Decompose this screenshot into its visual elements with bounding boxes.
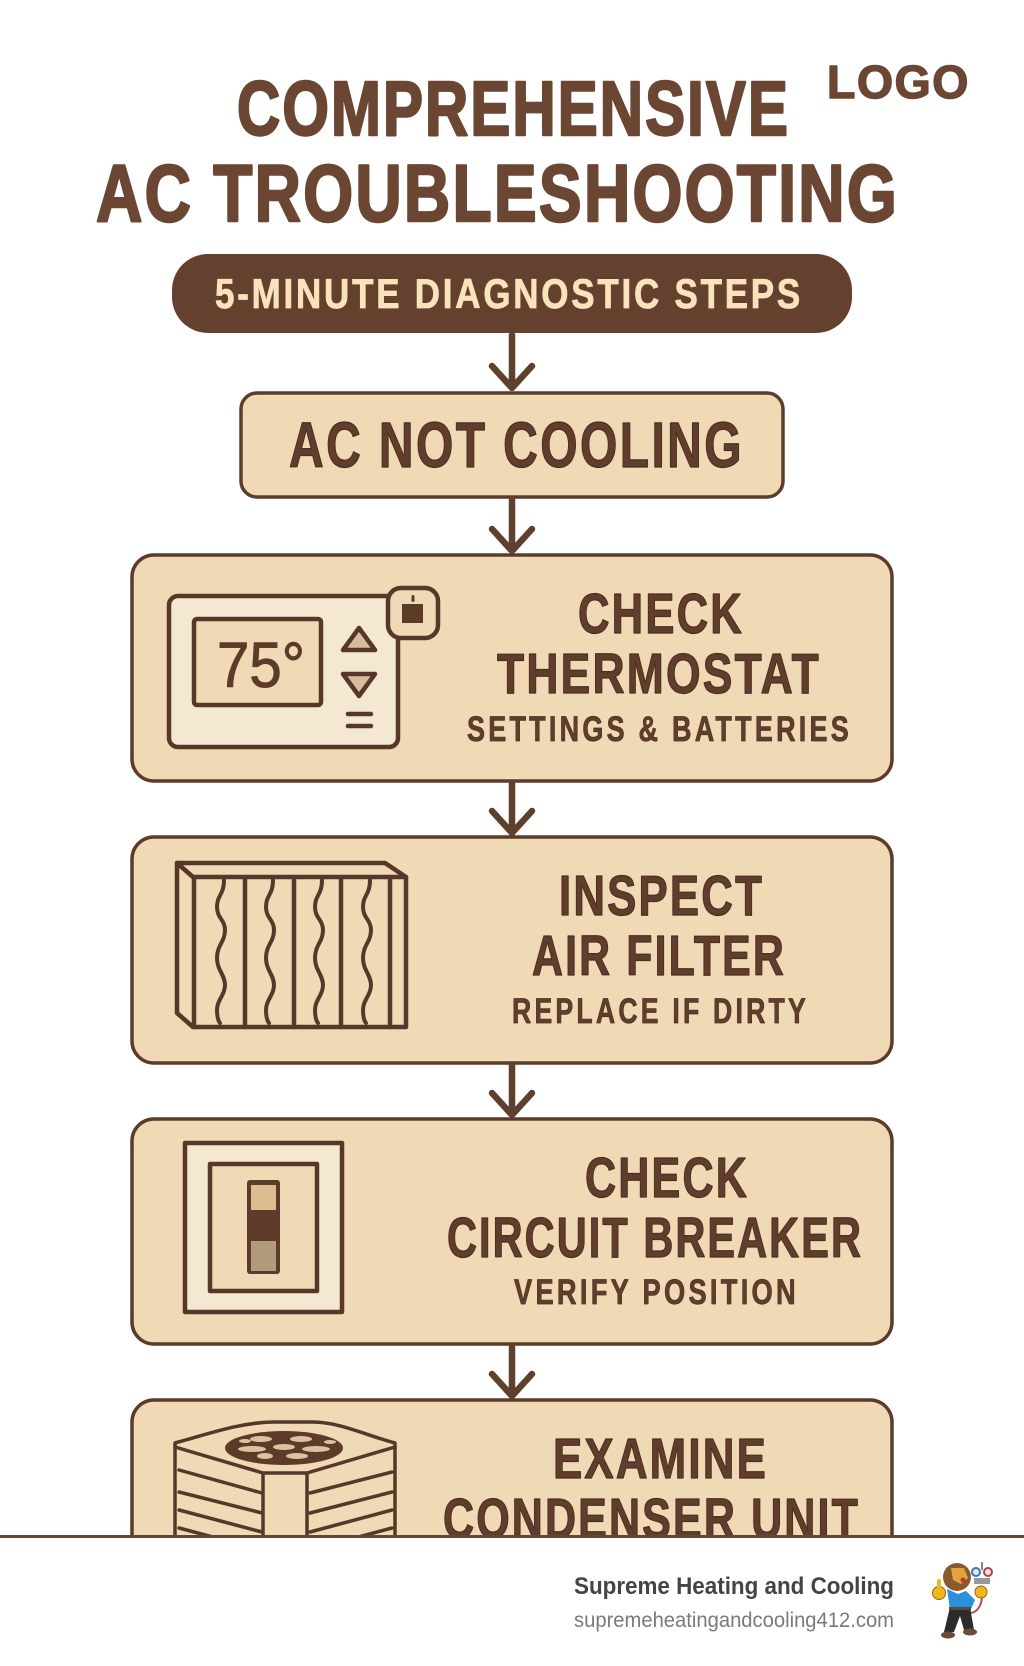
step text: examine condenser unit: EXAMINE	[553, 1427, 768, 1491]
title: COMPREHENSIVE	[237, 66, 790, 152]
logo text: LOGO	[827, 56, 970, 108]
step text: check circuit breaker	[447, 1146, 863, 1312]
arrow: problem box to thermostat step	[492, 499, 532, 551]
arrow: breaker to condenser step	[492, 1346, 532, 1396]
footer company name: Supreme Heating and Cooling	[574, 1573, 894, 1600]
footer website: supremeheatingandcooling412.com	[574, 1609, 894, 1632]
step text: check circuit breaker: CHECK	[585, 1146, 749, 1210]
step text: check thermostat	[467, 582, 852, 749]
subtitle pill: 5-MINUTE DIAGNOSTIC STEPS	[215, 270, 803, 317]
footer band	[0, 1535, 1024, 1666]
problem box: AC not cooling: AC NOT COOLING	[289, 409, 744, 481]
icon: air filter	[177, 863, 406, 1027]
panel: check thermostat	[132, 555, 892, 781]
icon: lion technician mascot	[932, 1562, 992, 1638]
step text: check thermostat: THERMOSTAT	[497, 642, 821, 706]
step text: check circuit breaker: CIRCUIT BREAKER	[447, 1206, 863, 1270]
title	[96, 66, 899, 239]
panel: inspect air filter	[132, 837, 892, 1063]
step text: inspect air filter: INSPECT	[559, 864, 764, 928]
arrow: thermostat to filter step	[492, 783, 532, 833]
arrow: pill to problem box	[492, 335, 532, 388]
arrow: filter to breaker step	[492, 1065, 532, 1115]
step text: inspect air filter	[512, 864, 809, 1031]
panel: check circuit breaker	[132, 1119, 892, 1344]
step text: check circuit breaker: VERIFY POSITION	[514, 1273, 799, 1312]
icon: circuit breaker switch	[185, 1143, 342, 1312]
icon: thermostat: 75°	[217, 629, 305, 701]
step text: check thermostat: CHECK	[578, 582, 744, 646]
step text: examine condenser unit	[443, 1427, 860, 1551]
step text: inspect air filter: REPLACE IF DIRTY	[512, 992, 809, 1031]
icon: thermostat	[169, 588, 438, 747]
step text: examine condenser unit: CONDENSER UNIT	[443, 1487, 860, 1551]
step text: check thermostat: SETTINGS & BATTERIES	[467, 710, 852, 749]
icon: condenser unit	[175, 1422, 395, 1560]
panel: examine condenser unit	[132, 1400, 892, 1626]
problem box: AC not cooling	[241, 393, 783, 497]
step text: inspect air filter: AIR FILTER	[532, 924, 786, 988]
subtitle pill	[172, 254, 852, 333]
